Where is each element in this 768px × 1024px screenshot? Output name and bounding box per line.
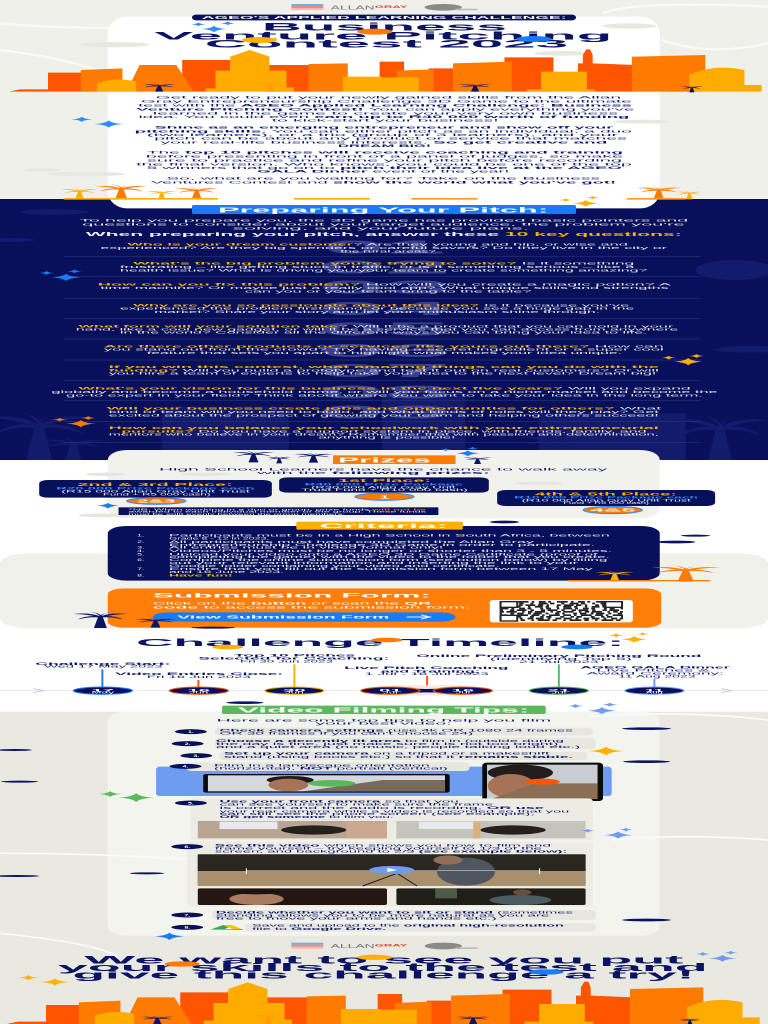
4th and 5th place box: 4&5 <box>590 508 635 513</box>
ten questions: feature that sets you apart to highlight what makes your idea unique. <box>147 351 622 355</box>
timeline date pills: 01 <box>379 688 405 692</box>
tip 4: Film in a landscape orientation <box>214 763 430 767</box>
title: Venture Pitching <box>154 29 612 42</box>
submission heading: Submission Form: <box>153 592 431 599</box>
panel: criteria <box>108 521 720 582</box>
tip 2 <box>172 738 596 749</box>
tips intro: Here are some top tips to help you film <box>217 718 554 722</box>
ten questions: experienced the problem first-hand, or because you see a huge gap in the <box>120 306 636 310</box>
intro pitch text: When preparing your pitch, answer these 10 key questions: <box>86 232 682 238</box>
heading bar <box>192 15 576 21</box>
prizes heading: Prizes <box>338 456 431 464</box>
timeline date pills: Jun <box>285 690 306 694</box>
tip 2: and a quiet area (no music, people talking loud etc.) <box>216 745 580 749</box>
intro text: before presenting in front of a panel of judges, so make <box>146 154 624 159</box>
prizes sparkles <box>96 447 480 509</box>
tips lower part <box>171 818 596 932</box>
ten questions: globally and become a household name, or will you focus on a niche market and become the <box>51 390 719 394</box>
timeline labels: Online Preliminary Pitching Round <box>416 654 703 658</box>
note box: awarded to each individual member of the group. These funds <box>128 510 427 513</box>
intro text: Get ready to put your newly gained skills from the Allan <box>156 95 622 100</box>
intro text: pitching skills. You can either pitch as an individual, a duo <box>135 129 633 134</box>
tips heading: Video Filming Tips: <box>238 706 529 715</box>
criteria list: and 16 June 2023. <box>169 570 284 574</box>
submission palms <box>73 611 235 629</box>
criteria list: Grade 8 - 12 in 2023. <box>169 536 269 540</box>
panel: video filming tips <box>0 701 768 957</box>
ten questions: frustrating – like getting stuck in traffic, or is it something serious – like a <box>120 265 636 269</box>
tip 6: See this video which shows you how to film and <box>215 843 551 847</box>
title <box>154 20 612 50</box>
logos bottom: GRAY <box>375 943 409 948</box>
1st place box: 1st Place: <box>338 479 432 484</box>
ten questions: you stand out from the crowd? Try having a secret ingredient or a super cool <box>104 347 664 351</box>
numerals: 01 <box>323 238 446 258</box>
closing title <box>58 953 708 981</box>
filming example photos <box>198 888 586 905</box>
timeline labels: and Training: <box>381 669 482 673</box>
tip 5: 5. <box>188 801 194 805</box>
2nd and 3rd place box: R20 000 Prize Package each <box>56 486 255 491</box>
ten questions: market? Share your story and let your enthusiasm shine through. <box>154 310 600 314</box>
1st place box: R40 000 Prize Package <box>305 482 464 487</box>
criteria list <box>137 533 612 577</box>
criteria list: Videos/Pitches must be no longer or shorter than 3 - 5 minutes. <box>169 549 612 553</box>
note box: *NB: When working in a duo or group, prize funds will not be <box>128 508 426 511</box>
4th and 5th place box: Fund + R5 000 cash) <box>563 501 650 505</box>
tip 7: 7. <box>184 913 190 917</box>
filming example video <box>198 854 586 886</box>
intro text: Gray Entrepreneurship Challenge 3D Game to the ultimate <box>141 99 633 104</box>
intro pitch text <box>79 218 689 238</box>
heading bar: AGEO'S APPLIED LEARNING CHALLENGE: <box>202 16 567 21</box>
tip 7 <box>171 910 596 921</box>
tip 1: 1. <box>188 730 194 734</box>
panel: intro card <box>108 17 660 208</box>
tip 6 block <box>187 842 593 907</box>
prizes intro: with the following prizes: <box>257 471 491 476</box>
criteria heading: Criteria: <box>319 522 448 530</box>
criteria list: out your relevant information and inserting the link to your <box>169 561 580 565</box>
ten questions: you hire a team of experts to help take your idea to the next level? Dream big! <box>109 371 656 375</box>
intro text: (two learners), or a trio (group of 3 learners), and your <box>147 133 619 138</box>
submission button: View Submission Form <box>177 615 390 620</box>
background: top section <box>0 0 768 200</box>
logos top: ALLAN <box>331 5 376 11</box>
tip 5: is correct and the audio is recording, OR use <box>220 806 544 810</box>
tip 3: Set up your camera on a tripod or a makeshift <box>224 752 549 756</box>
ten questions: What form will your solution take? Will it be a product that you can hold in your <box>78 324 675 328</box>
criteria list: 3. <box>137 545 144 549</box>
ten questions: experienced? Are they big spenders or careful savers? Do they live in the city or <box>100 246 669 250</box>
prizes heading <box>333 455 456 464</box>
ten questions: pursuits? Do you have a support system in place, with friends, family, and <box>121 429 648 433</box>
tip 8: Save and upload to the original high-resolution <box>252 923 564 927</box>
timeline labels: Fri 16 Jun 2023 <box>147 675 253 679</box>
intro text <box>135 95 635 185</box>
intro text: Venture Pitching Contest! You can apply everything you've <box>136 107 635 112</box>
tip 8: 8. <box>184 926 190 930</box>
timeline labels: Fri 30 Jun 2023 <box>240 659 335 663</box>
1st place box: Trust Fund + R10 000 cash) <box>301 488 469 492</box>
timeline date pills: May <box>92 690 117 694</box>
ten questions: How can you fix this problem? How will you create a magic potion? A <box>98 282 675 286</box>
timeline date pills: 11 <box>645 688 666 692</box>
clouds <box>22 23 671 176</box>
navy background silhouettes <box>0 209 768 460</box>
1st place box: 1 <box>380 495 392 500</box>
timeline date pills: 30 <box>283 688 309 692</box>
timeline labels: 21 Jul 2023 <box>519 660 601 664</box>
background: filming tips outer band <box>0 712 768 1024</box>
intro text: Shine as an emerging entrepreneur and show off your <box>155 125 613 130</box>
ten questions: Who is your dream customer? Are they young and hip, or wise and <box>127 242 629 246</box>
submission button <box>153 612 456 622</box>
criteria list: 4. <box>137 549 144 553</box>
numerals: 02 <box>318 258 451 278</box>
tip 2: 2. <box>185 742 191 746</box>
section: preparing your pitch <box>39 205 719 442</box>
timeline title coins <box>212 638 593 649</box>
numerals: 08 <box>318 383 451 403</box>
tip 1 <box>175 728 593 736</box>
panel: prizes <box>39 447 715 518</box>
timeline labels: 1 Jul - 16 Jul 2023 <box>365 672 491 676</box>
intro text: learned in the game to create your very own business <box>153 111 620 116</box>
tip 2: Choose a decently lit area to film in (outside during <box>216 739 564 743</box>
closing title: We want to see you put <box>84 953 685 966</box>
timeline date pills: Jun <box>190 690 210 694</box>
intro text: test with the AGEO Applied Learning Challenge: Business <box>138 103 633 108</box>
ten questions: time machine? Or maybe just a really cool app? What unique skills and strengths <box>100 286 671 290</box>
criteria list: 7. <box>137 567 144 571</box>
2nd and 3rd place box: Fund + R5 000 cash) <box>103 492 212 496</box>
criteria list: 5. <box>137 552 144 556</box>
4th and 5th place box: (R10 000 Allan Gray Unit Trust <box>522 498 693 502</box>
intro text: the final version. Who knows, you could be one of the top <box>136 162 633 167</box>
numerals: 06 <box>318 341 451 361</box>
closing coins <box>165 955 564 975</box>
QR code <box>490 600 633 622</box>
numerals: 05 <box>318 319 451 339</box>
ground strips <box>64 198 686 200</box>
intro text: GALA Dinner event of the year! <box>257 169 509 174</box>
timeline labels: Award Ceremony: <box>587 671 724 675</box>
submission text: code to access the submission form: <box>153 605 470 610</box>
timeline labels <box>35 653 731 679</box>
submission text <box>153 601 470 610</box>
tip 6: frame yourself – try keeping yourself to 1/3 of the <box>215 847 542 851</box>
tip 6 <box>171 843 567 854</box>
panel: submission form <box>73 588 661 629</box>
timeline axis <box>0 689 768 693</box>
criteria list: Upload your video onto a AGEO 3D Game Certificate (proof of <box>169 552 601 556</box>
submission card <box>108 588 661 628</box>
timeline date pills: 16 <box>452 688 477 692</box>
timeline live coaching connector <box>390 685 463 695</box>
intro text: pitch can be about any product or service that matches <box>154 136 629 141</box>
1st place box: (R30 000 Allan Gray Unit <box>311 485 458 489</box>
submission text: Click on the button or scan the QR <box>153 601 432 606</box>
note box: must be split evenly between the group members. <box>128 513 345 516</box>
intro text: Ventures Contest and show the world what you've got! <box>151 180 617 185</box>
criteria card <box>108 526 660 581</box>
numerals <box>318 238 453 423</box>
ten questions: funding? Will you build a prototype and test it out on real customers? Or will <box>109 368 659 372</box>
criteria clouds <box>490 521 710 543</box>
dividers <box>64 257 700 442</box>
intro text: The top 10 pitches will receive coaching and training <box>147 150 623 155</box>
timeline date pills: Jul <box>456 690 470 694</box>
criteria list: completing the game) with the video to the folder that you create. <box>169 555 610 559</box>
landscape phone photo <box>203 774 450 793</box>
tip 3 <box>180 752 587 760</box>
4th and 5th place box: R10 000 Prize Package each <box>514 495 698 500</box>
skyline bottom <box>7 982 760 1024</box>
timeline date pills: Jul <box>552 690 566 694</box>
background: cream prize and submission band <box>0 553 768 628</box>
tip 4 band <box>156 767 612 796</box>
tip 1: Check camera settings (use 4k OR 1080 24 frames <box>220 728 574 732</box>
ten questions: the rural areas? <box>340 249 437 253</box>
tips intro: your best video: <box>316 721 451 725</box>
timeline labels: Wed 17 May 2023 <box>44 664 164 668</box>
tip 7: Decide whether you want to sit or stand (sometimes <box>216 911 574 915</box>
tip 8: file to Google Drive. <box>252 927 386 931</box>
heading: preparing your pitch: Preparing Your Pitch: <box>218 206 549 214</box>
criteria heading <box>296 522 463 530</box>
timeline date pills: Aug <box>646 690 664 694</box>
block behind tip 5 photos <box>191 818 593 840</box>
timeline stems <box>102 664 654 687</box>
tip 1: OR 30 frames if you can't choose 24) <box>220 731 473 735</box>
timeline date pills <box>73 687 684 694</box>
criteria list: All entries must be in video format only! <box>169 545 443 549</box>
ten questions: hand, like a cool new gadget, or will it be a service that you can access from anywhere <box>76 327 680 331</box>
prizes palms <box>233 451 492 464</box>
logos bottom: ALLAN <box>331 944 376 950</box>
tips heading <box>222 706 546 715</box>
tip 7: free to move your arms and hands etc.) <box>216 917 497 921</box>
title coins <box>242 29 552 43</box>
title: Business <box>262 20 508 33</box>
timeline labels: Live Pitch Coaching <box>344 666 510 670</box>
ten questions: If you win this contest, what amazing things can you do with the <box>109 365 660 369</box>
tip 4: 4. <box>183 765 188 769</box>
palms intro right <box>637 186 703 199</box>
criteria list: Complete the online submission form (see button below) by filling <box>169 558 610 562</box>
closing title: your skills to the test and <box>58 961 708 973</box>
criteria list: 8. <box>137 573 144 577</box>
tip 2: the day is fine, just make sure it is not too bright) <box>216 742 558 746</box>
timeline labels: Video Entries Close: <box>115 672 285 676</box>
ten questions: anything is possible! <box>318 435 456 439</box>
tip 5: can see yourself to make sure the frame <box>220 803 493 807</box>
timeline date pills: Jul <box>383 690 398 694</box>
timeline labels: (Identifying Top 5) <box>490 657 634 661</box>
intro pitch text: solving, and your future plans. <box>233 226 529 231</box>
intro pitch text: questions to consider about your target audience, the problem you're <box>82 222 686 227</box>
tip 7: standing allows you to be more natural as you are <box>216 913 550 917</box>
criteria list: All participants must have completed the Allan Gray <box>169 540 537 544</box>
ten questions: How can you balance your schoolwork with your entrepreneurial <box>109 426 659 430</box>
sparkles blue <box>72 22 235 128</box>
ten questions: in the world? Consider all the different ways you can bring your idea to life. <box>120 330 648 334</box>
tip 6: 6. <box>184 845 190 849</box>
criteria list: 6. <box>137 558 144 562</box>
intro text: sure to practice and refine your pitch before recording <box>147 158 623 163</box>
prizes card <box>108 450 660 518</box>
tip 8 <box>171 923 596 932</box>
tips card <box>108 712 660 936</box>
tips clouds <box>0 701 671 921</box>
timeline date pills: 16 <box>188 688 213 692</box>
tip 3: stand (using books etc.) so that it remains stable. <box>224 755 573 759</box>
numerals: 03 <box>318 278 451 298</box>
logos top: GRAY <box>375 5 409 10</box>
sparkles amber <box>559 196 599 207</box>
2nd and 3rd place box <box>39 480 272 504</box>
intro text: idea. You could even earn up to R40 000 worth of funding <box>139 115 629 120</box>
tip 4: (horizontal), NOT portrait (vertical) <box>214 767 448 771</box>
4th and 5th place box <box>497 490 715 514</box>
ten questions: Are there other products or services like yours out there? How can <box>104 344 665 348</box>
timeline title: Challenge Timeline: <box>136 637 624 648</box>
tip 5: OR get someone to film you. <box>220 815 394 819</box>
section: challenge timeline <box>0 633 768 695</box>
timeline date pills: 17 <box>92 688 117 692</box>
background: navy pitch section <box>0 199 768 460</box>
criteria list: Ensure that you fill out the submission form between 17 May <box>169 567 596 571</box>
tip 5: your rear camera while a video is recorded so that you <box>220 809 570 813</box>
tips sparkles <box>98 703 633 839</box>
ten questions <box>51 242 719 439</box>
intro text: your real-life business interests. So get creative and <box>161 140 607 145</box>
timeline labels: Live Pitches & <box>597 668 710 672</box>
closing sparkles <box>18 951 738 986</box>
prizes clouds <box>78 473 563 517</box>
numerals: 09 <box>318 403 451 423</box>
prizes intro <box>159 467 609 476</box>
intro text: 5 winners that go on to pitch their idea live at the AGEO <box>147 166 622 171</box>
title: Contest 2023 <box>205 37 569 50</box>
timeline labels: Top 10 Pitches <box>234 653 357 657</box>
tip 5 <box>175 798 593 832</box>
ten questions: go-to expert in your field? Think about where you want to take your idea in the long term. <box>66 393 703 397</box>
ten questions: can you or your team bring to the table? <box>245 289 533 293</box>
closing sparkle <box>155 933 184 940</box>
criteria list: 2. <box>137 540 144 544</box>
intro pitch text: To help you prepare you, the 3D game has provided basic pointers and <box>79 218 689 223</box>
tip 5: Use your front camera so that you <box>220 799 459 803</box>
criteria list: 1. <box>137 533 144 537</box>
ten questions: Will your business create jobs and opportunities for others? What <box>107 406 664 410</box>
intro text: to kick-start your business! <box>272 118 499 123</box>
intro text: DREAM BIG! <box>338 144 432 149</box>
4th and 5th place box: 4th & 5th Place: <box>535 492 678 497</box>
logos bottom <box>291 943 478 950</box>
skyline top <box>9 49 762 92</box>
criteria list: Entrepreneurship Challenge 3D Game in order to participate. <box>169 543 595 547</box>
timeline labels: 11 Aug 2023 <box>618 674 697 678</box>
criteria palms <box>568 565 720 582</box>
tips top part <box>156 706 612 832</box>
timeline sparkles <box>609 633 648 643</box>
logos top <box>291 4 478 11</box>
1st place box <box>279 477 489 500</box>
portrait phone photo <box>482 763 603 801</box>
criteria list: Have fun! <box>169 573 233 577</box>
tip 4 <box>170 762 470 771</box>
palms intro left <box>61 184 218 199</box>
prizes intro: High School Learners have the chance to walk away <box>159 467 609 472</box>
2nd and 3rd place box: 2nd & 3rd Place: <box>77 483 233 488</box>
ten questions: kind of team will you need to build, and what kinds of roles will they play? Get <box>109 410 661 414</box>
timeline labels: Challenge Start: <box>35 662 173 666</box>
sparkles in navy <box>39 270 704 427</box>
2nd and 3rd place box: (R15 000 Allan Gray Unit Trust <box>61 489 252 493</box>
tip 5 photos <box>198 821 586 838</box>
timeline labels: AGEO GALA Dinner <box>580 665 731 669</box>
numerals: 04 <box>318 299 453 319</box>
criteria list: Google folder containing your video and certificate. <box>169 564 500 568</box>
closing title: give this challenge a try! <box>72 968 695 981</box>
tip 6: screen, and background to 2/3 (see example below): <box>215 850 567 854</box>
ten questions: Why are you so passionate about this idea? Is it because you've <box>133 303 631 307</box>
timeline labels: Selected for Coaching: <box>198 656 392 660</box>
ten questions: What's your vision for this business in the next five years? Will you expand <box>78 386 692 390</box>
numerals: 07 <box>318 361 451 381</box>
tip 5: can still see the phone screen (see example), <box>220 812 535 816</box>
ten questions: mentors who believe in your dream? Remember that with passion and determination, <box>109 432 659 436</box>
criteria list: Participants must be in a High School in South Africa, between <box>169 533 612 537</box>
timeline date pills: 21 <box>548 688 573 692</box>
ten questions: health issue? What is driving you/your team to create something amazing? <box>120 268 649 272</box>
note box <box>119 507 438 516</box>
2nd and 3rd place box: 2&3 <box>137 499 175 504</box>
ten questions: excited about the prospect of growing your team and helping others succeed! <box>109 413 659 417</box>
heading: preparing your pitch <box>192 205 576 214</box>
tip 3: 3. <box>193 754 199 758</box>
tips intro <box>217 718 554 725</box>
intro text: So, what are you waiting for? Take on the Business <box>167 176 602 181</box>
ten questions: What's the big problem you're trying to solve? Is it something <box>133 261 636 265</box>
